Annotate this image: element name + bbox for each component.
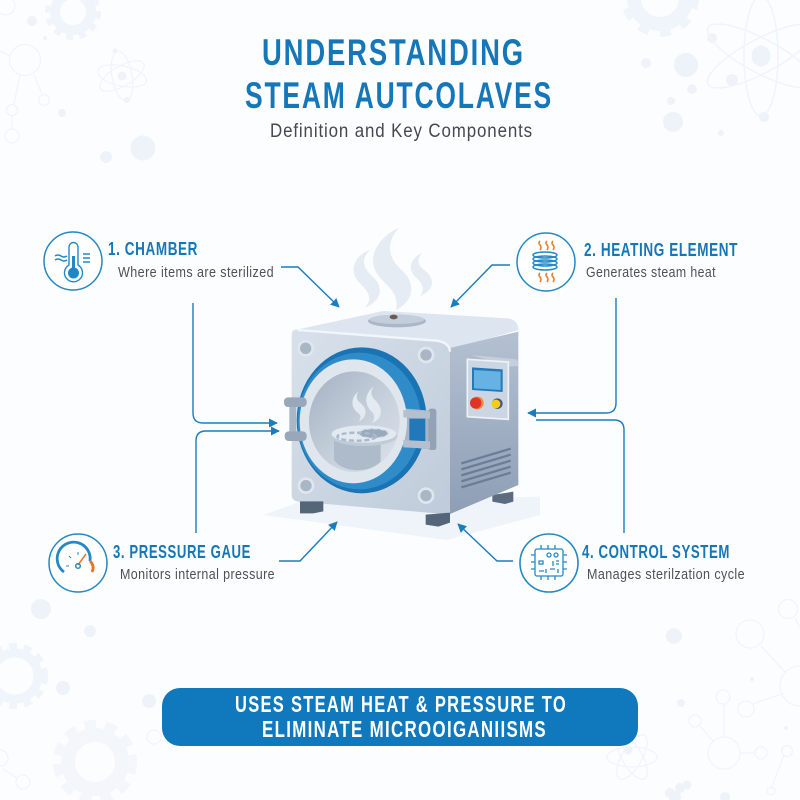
banner [162, 688, 638, 746]
callout: heating element [517, 233, 738, 291]
door ring [297, 347, 427, 493]
bolts [299, 341, 433, 503]
steam [354, 227, 432, 310]
icon: thermometer [44, 232, 102, 290]
description: Where items are sterilized [118, 264, 274, 281]
arrow: chamber to top [281, 267, 339, 307]
side face [448, 332, 518, 514]
front face [292, 329, 450, 514]
control panel [467, 355, 519, 419]
callout: chamber [44, 232, 274, 290]
banner text [235, 691, 567, 742]
title: UNDERSTANDING [262, 32, 525, 73]
arrow: heating to panel [528, 298, 616, 413]
callout: control system [520, 534, 745, 592]
banner text: USES STEAM HEAT & PRESSURE TO [235, 691, 567, 717]
arrow: heating to top [451, 265, 510, 307]
hinge arms [403, 410, 430, 449]
rear foot [492, 492, 513, 504]
subtitle: Definition and Key Components [270, 120, 533, 142]
left handles [284, 397, 307, 441]
icon: circuit chip [520, 534, 578, 592]
inner steam [352, 386, 381, 423]
heading: 3. PRESSURE GAUE [113, 542, 251, 562]
heading: 4. CONTROL SYSTEM [582, 542, 730, 562]
callout: pressure gauge [49, 534, 275, 592]
icon: heating coil [517, 233, 575, 291]
front feet [300, 501, 323, 513]
description: Monitors internal pressure [120, 566, 275, 583]
arrow: pressure to door [196, 431, 279, 533]
connector arrows [193, 265, 624, 561]
door [300, 359, 407, 483]
vents [461, 449, 511, 487]
inner rack [331, 425, 397, 470]
arrow: control to panel [536, 420, 624, 533]
description: Generates steam heat [586, 264, 716, 281]
icon: gauge [49, 534, 107, 592]
floor shadow [263, 497, 540, 540]
autoclave illustration [263, 227, 540, 540]
right hinge [403, 408, 436, 450]
top port [368, 315, 426, 327]
top face [295, 311, 518, 350]
heading: 1. CHAMBER [108, 239, 198, 259]
heading: 2. HEATING ELEMENT [584, 240, 738, 260]
arrow: control to base [458, 524, 513, 561]
description: Manages sterilzation cycle [587, 566, 745, 583]
arrow: chamber to door [193, 303, 277, 423]
banner text: ELIMINATE MICROOIGANIISMS [262, 716, 547, 742]
arrow: pressure to base [279, 522, 337, 561]
title [245, 32, 553, 116]
window [309, 371, 400, 472]
title: STEAM AUTCOLAVES [245, 75, 553, 116]
